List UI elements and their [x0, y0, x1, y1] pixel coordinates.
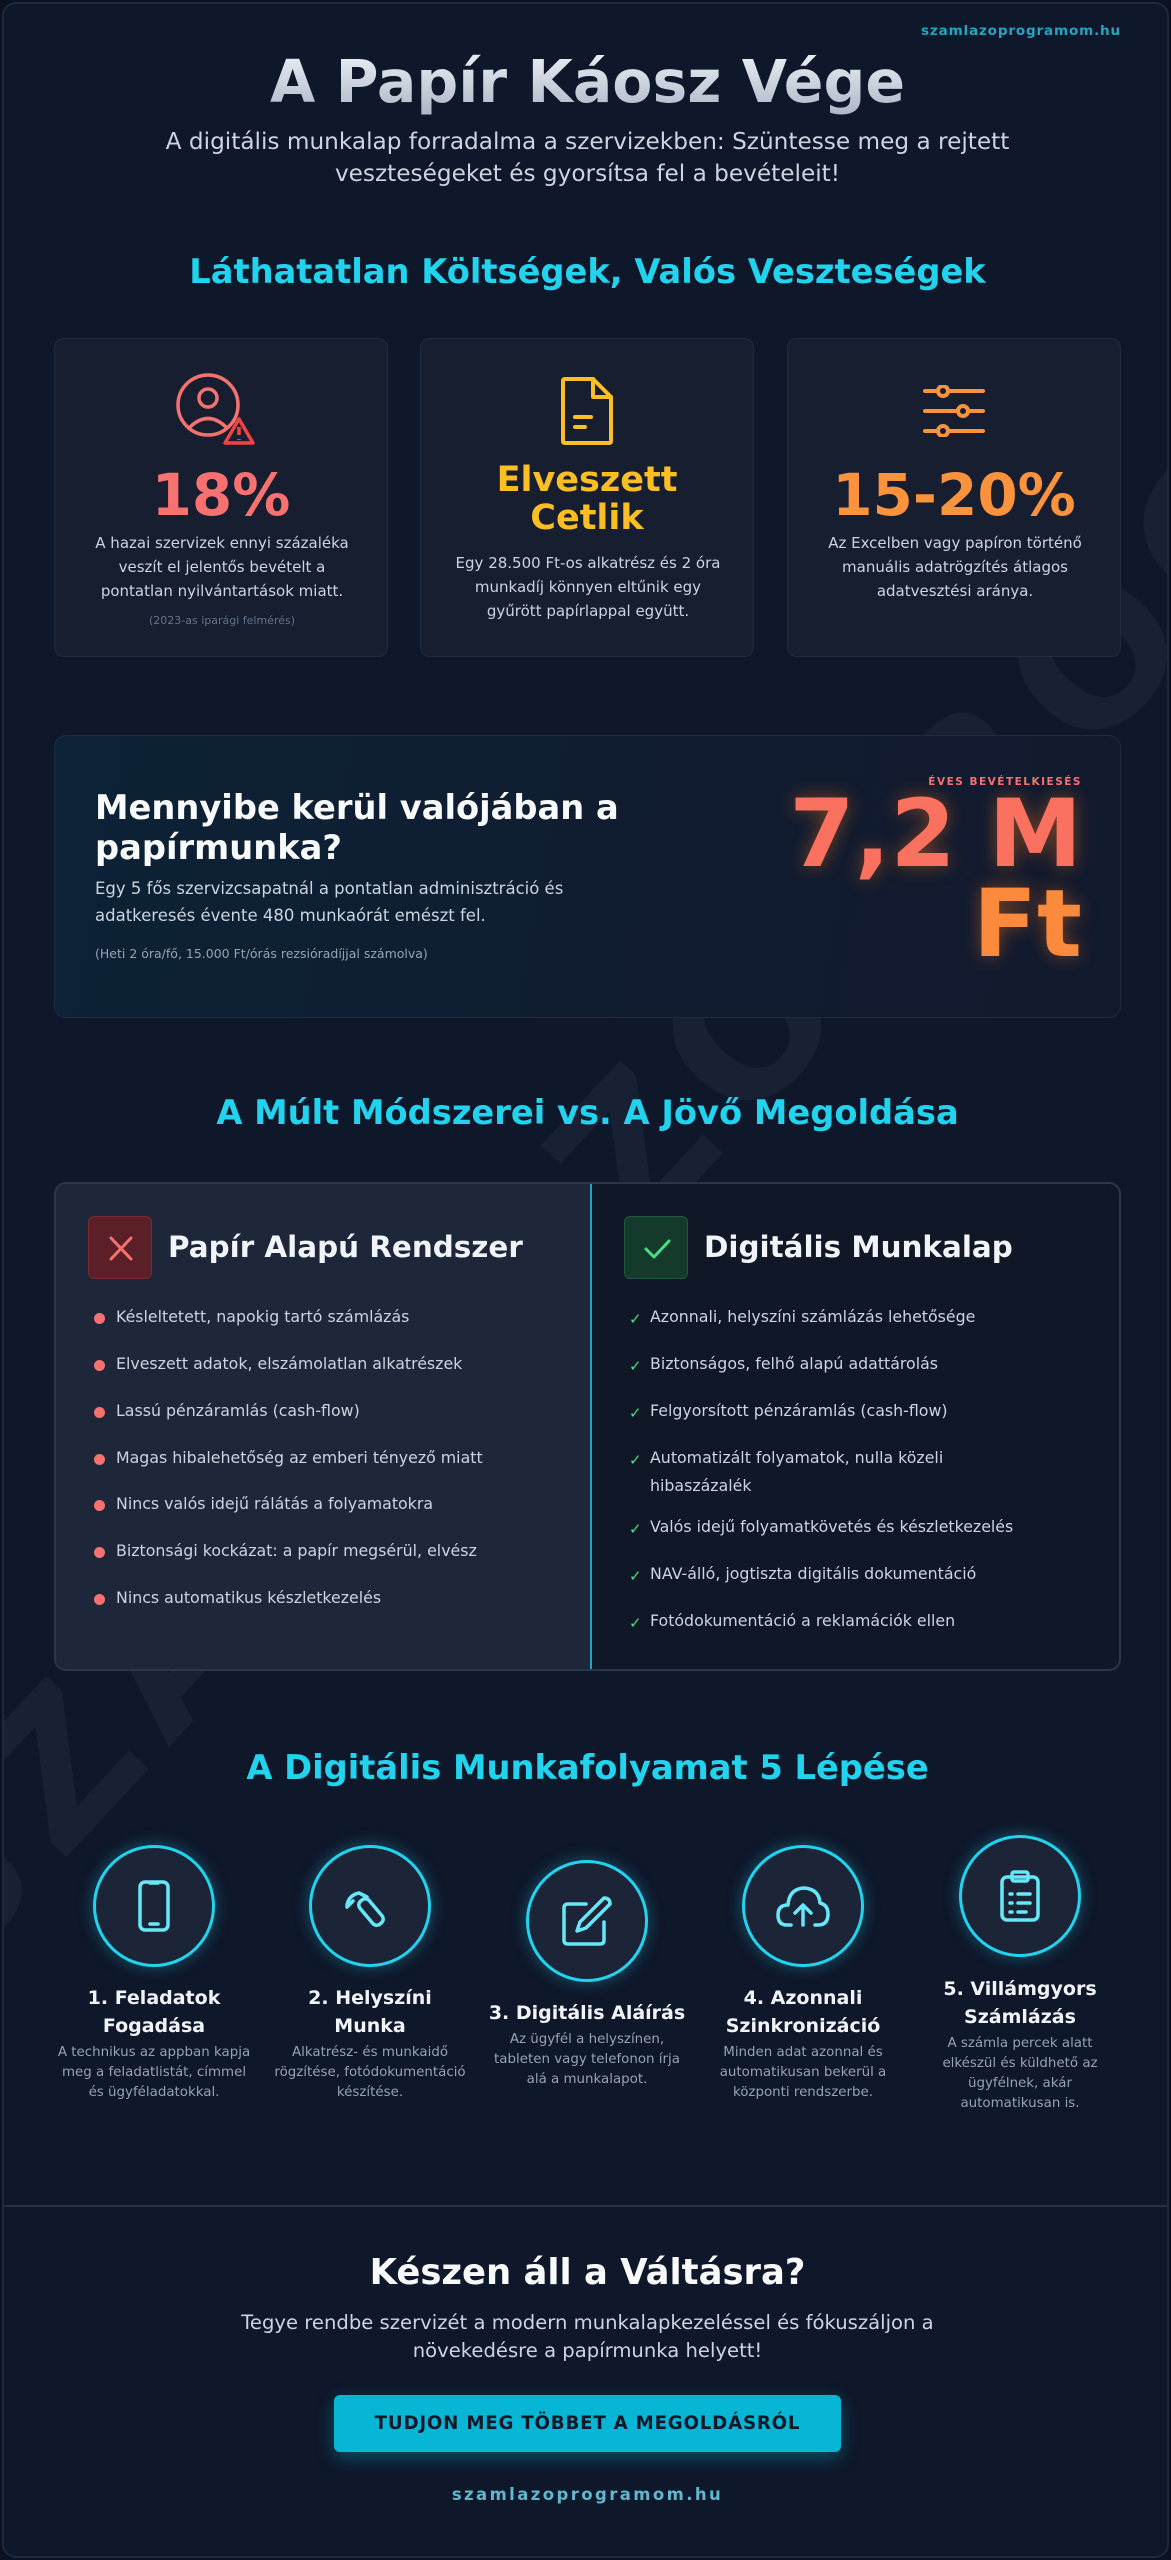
column: digital: ✓ [629, 1310, 642, 1328]
list: Automatizált folyamatok, nulla közeli [650, 1448, 943, 1467]
column: digital: ✓ [629, 1614, 642, 1632]
body text: Egy 5 fős szervizcsapatnál a pontatlan adminisztráció és adatkeresés évente 480 munkaórát emészt fel. [95, 879, 563, 925]
big number: Ft [973, 870, 1082, 979]
step 2 [274, 1836, 466, 2100]
step title: 5. Villámgyors [943, 1978, 1097, 2000]
step desc: Az ügyfél a helyszínen, tableten vagy telefonon írja alá a munkalapot. [494, 2032, 680, 2087]
column: digital: ✓ [629, 1451, 642, 1469]
footer brand: szamlazoprogramom.hu [452, 2485, 723, 2504]
icon: x [88, 1216, 152, 1279]
list: Nincs automatikus készletkezelés [116, 1588, 381, 1607]
step title: 4. Azonnali [744, 1987, 862, 2009]
heading: Mennyibe kerül valójában a papírmunka? [95, 788, 619, 867]
cta button [334, 2395, 841, 2452]
heading: steps: A Digitális Munkafolyamat 5 Lépése [246, 1748, 929, 1787]
brand top right: szamlazoprogramom.hu [921, 23, 1121, 39]
list: Valós idejű folyamatkövetés és készletkezelés [650, 1517, 1013, 1536]
step 4 [720, 1836, 886, 2100]
description: Az Excelben vagy papíron történő manuális adatrögzítés átlagos adatvesztési aránya. [828, 534, 1082, 600]
icon: user warning [176, 373, 255, 445]
icon: sliders [923, 385, 985, 437]
icon: check [624, 1216, 688, 1279]
step title: 2. Helyszíni [308, 1987, 432, 2009]
column: digital: ✓ [629, 1357, 642, 1375]
step title: 1. Feladatok [88, 1987, 220, 2009]
step title [726, 1987, 880, 2037]
description: Egy 28.500 Ft-os alkatrész és 2 óra munkadíj könnyen eltűnik egy gyűrött papírlappal együtt. [456, 554, 720, 620]
panel: cost callout [54, 735, 1121, 1018]
cta text: Tegye rendbe szervizét a modern munkalapkezeléssel és fókuszáljon a növekedésre a papírmunka helyett! [241, 2311, 934, 2362]
column: paper [56, 1184, 590, 1673]
panel: comparison [54, 1182, 1121, 1671]
step title [308, 1987, 432, 2037]
list: NAV-álló, jogtiszta digitális dokumentáció [650, 1564, 976, 1583]
step 3 [489, 1852, 685, 2087]
title: A Papír Káosz Vége [270, 48, 905, 116]
icon: document [561, 377, 613, 445]
icon: phone [93, 1845, 215, 1967]
step desc: A technikus az appban kapja meg a feladatlistát, címmel és ügyféladatokkal. [58, 2045, 250, 2100]
heading: Papír Alapú Rendszer [168, 1230, 523, 1264]
description: A hazai szervizek ennyi százaléka veszít el jelentős bevételt a pontatlan nyilvántartások miatt. [95, 534, 349, 600]
list: Késleltetett, napokig tartó számlázás [116, 1307, 409, 1326]
card: 15-20% [787, 338, 1121, 657]
step 1 [58, 1836, 250, 2100]
step title: 3. Digitális Aláírás [489, 2002, 685, 2024]
subtitle: A digitális munkalap forradalma a szervizekben: Szüntesse meg a rejtett veszteségeket és gyorsítsa fel a bevételeit! [166, 128, 1009, 187]
cta button: TUDJON MEG TÖBBET A MEGOLDÁSRÓL [375, 2413, 800, 2434]
title [4, 46, 1171, 118]
list: Biztonsági kockázat: a papír megsérül, elvész [116, 1541, 477, 1560]
list: hibaszázalék [650, 1476, 752, 1495]
stat number: 15-20% [832, 461, 1076, 529]
list: Biztonságos, felhő alapú adattárolás [650, 1354, 938, 1373]
step desc: Minden adat azonnal és automatikusan bekerül a központi rendszerbe. [720, 2045, 886, 2100]
icon: clipboard [959, 1835, 1081, 1957]
heading: Digitális Munkalap [704, 1230, 1013, 1264]
list [94, 1307, 483, 1607]
list: Nincs valós idejű rálátás a folyamatokra [116, 1494, 433, 1513]
cta heading: Készen áll a Váltásra? [370, 2252, 805, 2293]
divider line [4, 2205, 1171, 2207]
card: lost notes [420, 338, 754, 657]
step desc: Alkatrész- és munkaidő rögzítése, fotódokumentáció készítése. [274, 2045, 466, 2100]
heading: hidden costs: Láthatatlan Költségek, Valós Veszteségek [189, 252, 986, 291]
stat title [497, 460, 677, 538]
source note: (2023-as iparági felmérés) [149, 614, 295, 627]
heading: comparison: A Múlt Módszerei vs. A Jövő Megoldása [216, 1093, 959, 1132]
stat title: Elveszett [497, 460, 677, 500]
list: Magas hibalehetőség az emberi tényező miatt [116, 1448, 483, 1467]
icon: signature pen [526, 1860, 648, 1982]
step title: Fogadása [103, 2015, 205, 2037]
step title: Munka [334, 2015, 406, 2037]
list: Elveszett adatok, elszámolatlan alkatrészek [116, 1354, 462, 1373]
label: ÉVES BEVÉTELKIESÉS [928, 776, 1082, 788]
step title [943, 1978, 1097, 2028]
column: digital: ✓ [629, 1567, 642, 1585]
stat title: Cetlik [530, 498, 644, 538]
list: Fotódokumentáció a reklamációk ellen [650, 1611, 955, 1630]
column: digital [624, 1216, 1013, 1632]
icon: hammer [309, 1845, 431, 1967]
big number: 7,2 M [789, 780, 1082, 889]
step 5 [942, 1826, 1098, 2111]
list [629, 1307, 1013, 1632]
card: 18% [54, 338, 388, 657]
list: Azonnali, helyszíni számlázás lehetősége [650, 1307, 975, 1326]
step title [88, 1987, 221, 2037]
divider [590, 1184, 592, 1673]
list: Lassú pénzáramlás (cash-flow) [116, 1401, 360, 1420]
column: digital: ✓ [629, 1404, 642, 1422]
list: Felgyorsított pénzáramlás (cash-flow) [650, 1401, 948, 1420]
note: (Heti 2 óra/fő, 15.000 Ft/órás rezsióradíjjal számolva) [95, 946, 428, 961]
step title: Szinkronizáció [726, 2015, 880, 2037]
step desc: A számla percek alatt elkészül és küldhető az ügyfélnek, akár automatikusan is. [942, 2036, 1098, 2111]
step title: Számlázás [964, 2006, 1076, 2028]
icon: cloud upload [742, 1845, 864, 1967]
column: digital: ✓ [629, 1520, 642, 1538]
big number [786, 780, 1088, 979]
stat number: 18% [152, 461, 290, 529]
